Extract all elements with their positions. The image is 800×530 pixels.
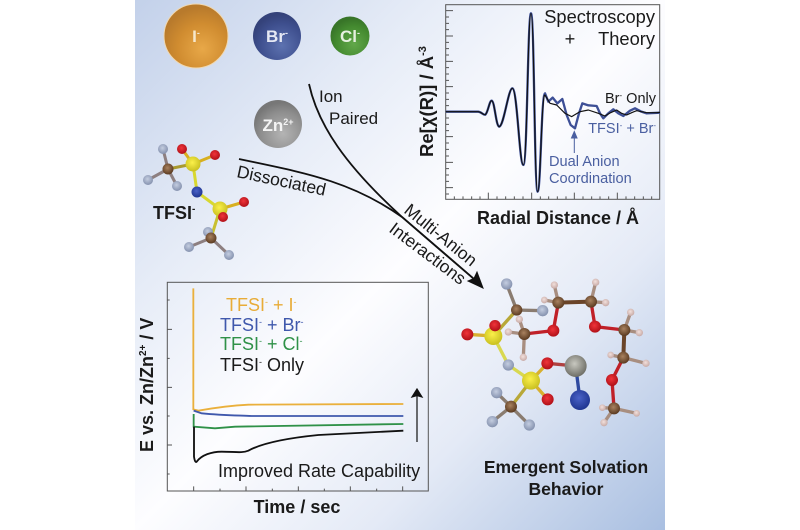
curve: TFSI + Cl [194, 414, 403, 428]
plus theory heading: Theory [598, 28, 656, 49]
legend: TFSI + Cl: TFSI [220, 334, 259, 354]
curve: TFSI only [194, 427, 403, 462]
iodide ion sphere: I [192, 27, 197, 46]
curve: TFSI + I [193, 288, 403, 411]
TFSI molecule [143, 144, 249, 260]
legend: Br only: - [619, 91, 622, 100]
legend: TFSI only: Only [262, 355, 304, 375]
voltage chart [167, 282, 428, 491]
plus theory heading [565, 28, 656, 49]
dissociated label: Dissociated [235, 161, 328, 200]
voltage y-axis label: / V [137, 318, 157, 345]
emergent solvation behavior label: Behavior [529, 479, 604, 499]
zinc ion sphere: 2+ [283, 117, 294, 127]
callout: dual anion coordination [549, 154, 632, 187]
spectroscopy y-axis label: -3 [417, 46, 429, 56]
legend: TFSI + Br: TFSI [588, 121, 620, 137]
multi-anion label: Multi-Anion [400, 200, 481, 270]
arrow: dual anion pointer [572, 132, 577, 153]
chart ticks [446, 11, 652, 199]
callout: dual anion coordination: Dual Anion [549, 154, 620, 170]
spectroscopy x-axis label: Radial Distance / Å [477, 208, 639, 228]
zinc ion sphere [254, 100, 302, 148]
chart ticks [167, 300, 403, 491]
iodide ion sphere: - [197, 28, 200, 38]
interactions label: Interactions [386, 218, 470, 289]
converging arrow [239, 84, 483, 288]
spectrum: Br only [446, 13, 660, 192]
spectroscopy heading: Spectroscopy [544, 6, 656, 27]
solvation structure molecule [461, 278, 650, 431]
bromide ion sphere: - [285, 28, 288, 38]
legend: TFSI + I: - [294, 297, 297, 307]
ion paired label [319, 87, 378, 128]
voltage y-axis label: E vs. Zn/Zn [137, 356, 157, 452]
legend: TFSI + Br: - [620, 121, 623, 130]
chloride ion sphere [330, 16, 370, 56]
spectrum: TFSI + Br [446, 13, 660, 192]
callout: dual anion coordination: Coordination [549, 171, 632, 187]
iodide ion sphere [164, 4, 228, 68]
bromide ion sphere: Br [266, 27, 285, 46]
plus theory heading: + [565, 28, 575, 49]
background panel [135, 0, 665, 530]
TFSI label: TFSI [153, 203, 192, 223]
voltage x-axis label: Time / sec [254, 497, 340, 517]
spectroscopy y-axis label: Re[χ(R)] / Å [416, 56, 437, 157]
emergent solvation behavior label: Emergent Solvation [484, 457, 648, 477]
TFSI label: - [192, 204, 195, 215]
legend: TFSI only: TFSI [220, 355, 259, 375]
legend: TFSI + Br: - [301, 317, 304, 327]
curve: TFSI + Br [194, 411, 403, 416]
legend: Br only: Only [622, 91, 657, 107]
legend: TFSI + Cl: + Cl [262, 334, 300, 354]
ion paired label: Ion [319, 87, 343, 106]
legend: TFSI + Cl: - [300, 336, 303, 346]
emergent solvation behavior label [484, 457, 648, 499]
ion paired label: Paired [329, 109, 378, 128]
legend: TFSI + Br: - [259, 317, 262, 327]
legend: Br only: Br [605, 91, 619, 107]
chloride ion sphere: - [357, 28, 360, 38]
spectroscopy chart [446, 5, 660, 199]
legend: TFSI + Br: TFSI [220, 315, 259, 335]
legend: TFSI + Br: + Br [622, 121, 653, 137]
legend: TFSI + Br: + Br [262, 315, 301, 335]
arrow: improvement [412, 389, 422, 442]
legend: TFSI + Br: - [653, 121, 656, 130]
improved rate capability label: Improved Rate Capability [218, 461, 420, 481]
zinc ion sphere: Zn [262, 116, 283, 135]
legend: TFSI + Cl: - [259, 336, 262, 346]
bromide ion sphere [253, 12, 301, 60]
legend: TFSI only: - [259, 357, 262, 367]
legend: TFSI + I: - [265, 297, 268, 307]
legend: TFSI + I: + I [268, 295, 294, 315]
chloride ion sphere: Cl [340, 27, 357, 46]
legend: TFSI + I: TFSI [226, 295, 265, 315]
voltage y-axis label: 2+ [138, 344, 149, 356]
